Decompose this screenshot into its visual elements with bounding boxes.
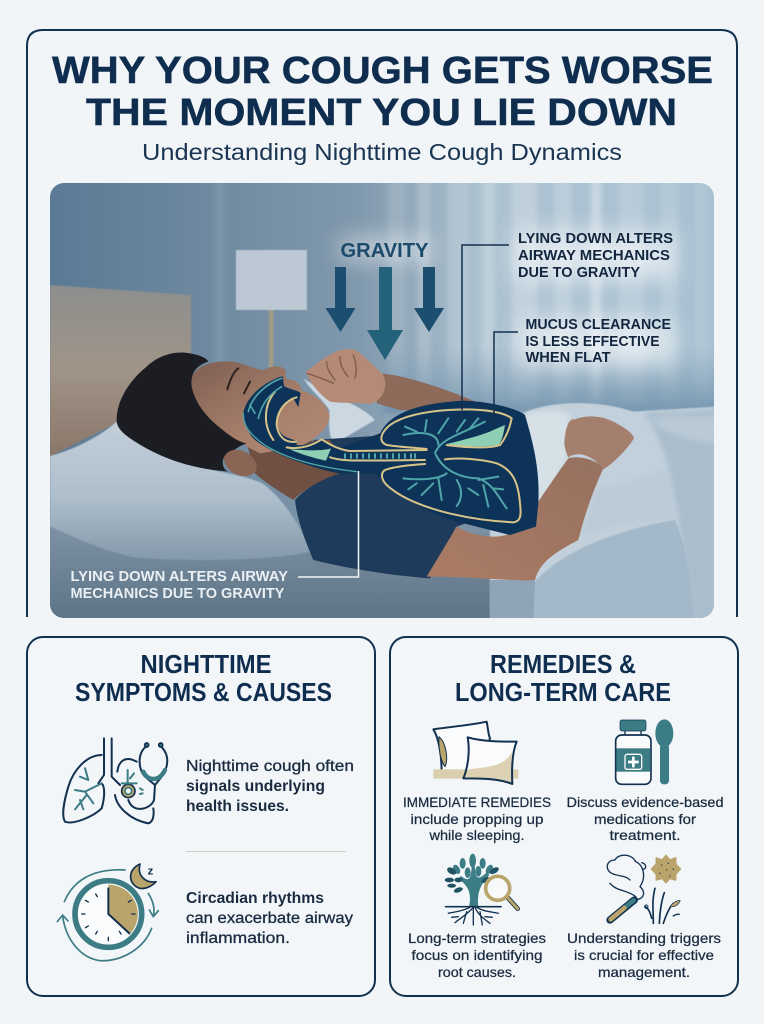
title: THE MOMENT YOU LIE DOWN — [86, 92, 677, 134]
text: triggers: management. — [598, 964, 690, 980]
heading: remedies — [455, 651, 671, 707]
heading: symptoms: NIGHTTIME — [140, 651, 272, 679]
text: underlying health issues: signals underlying — [186, 778, 325, 795]
callout leader: airway mechanics — [462, 245, 509, 410]
neck — [247, 440, 347, 500]
text: immediate remedies: while sleeping. — [428, 827, 524, 843]
heading: symptoms: SYMPTOMS & CAUSES — [75, 679, 332, 707]
callout: lower label: LYING DOWN ALTERS AIRWAY — [70, 568, 288, 585]
icon: pillows — [433, 722, 518, 784]
text: long-term strategies: root causes. — [438, 964, 516, 980]
title — [52, 50, 713, 134]
heading: remedies: REMEDIES & — [490, 651, 636, 679]
callout: mucus clearance: WHEN FLAT — [526, 349, 610, 366]
callout: mucus clearance: IS LESS EFFECTIVE — [526, 333, 660, 350]
blanket — [490, 403, 717, 623]
text: underlying health issues — [186, 758, 354, 815]
text: circadian rhythms: Circadian rhythms — [186, 890, 324, 907]
icon: smoke, pollen and grass triggers — [607, 855, 680, 923]
text: underlying health issues: health issues. — [186, 798, 289, 815]
callout: airway mechanics — [518, 233, 672, 277]
text: triggers: Understanding triggers — [567, 930, 721, 946]
person: lower arm and hand — [427, 416, 634, 580]
callout: airway mechanics: AIRWAY MECHANICS — [518, 247, 670, 264]
icon: lungs with stethoscope — [63, 738, 167, 823]
callout leader: mucus — [494, 332, 518, 428]
panel: top frame — [27, 30, 737, 617]
subtitle: Understanding Nighttime Cough Dynamics — [142, 139, 622, 165]
text: medications — [566, 794, 724, 843]
bronchi — [243, 378, 507, 508]
mattress — [50, 520, 714, 620]
navy anatomy patch — [243, 376, 539, 535]
callout leader: lower label — [298, 471, 358, 577]
person: head, pillows and raised arm — [50, 349, 483, 578]
back pillow — [303, 378, 375, 443]
gravity label: GRAVITY — [340, 239, 429, 262]
text: circadian rhythms: can exacerbate airway — [186, 910, 353, 927]
heading: symptoms — [75, 651, 332, 707]
callout: mucus clearance — [526, 319, 670, 362]
text: long-term strategies: Long-term strategies — [408, 930, 546, 946]
illustration: patient lying in bed with airway overlay — [50, 180, 721, 623]
text: underlying health issues: Nighttime cough often — [186, 758, 354, 775]
mucus in lung — [447, 425, 505, 446]
mucus in throat — [290, 448, 331, 461]
bedroom wall, curtains, lamp and headboard — [50, 180, 721, 457]
text: medications: treatment. — [610, 827, 680, 843]
callout: airway mechanics: LYING DOWN ALTERS — [518, 230, 673, 247]
text: immediate remedies — [403, 794, 551, 843]
lung outlines — [266, 392, 521, 522]
fist — [306, 349, 385, 404]
panel: nighttime symptoms and causes — [27, 637, 375, 996]
title: WHY YOUR COUGH GETS WORSE — [52, 50, 713, 92]
hair — [117, 352, 247, 472]
callout: airway mechanics: DUE TO GRAVITY — [518, 264, 640, 281]
text: triggers: is crucial for effective — [574, 947, 714, 963]
airway and lung overlay — [243, 376, 539, 535]
panel: remedies and long-term care — [390, 637, 738, 996]
heading: remedies: LONG-TERM CARE — [455, 679, 671, 707]
raised forearm — [376, 374, 475, 410]
callout: lower label: MECHANICS DUE TO GRAVITY — [70, 585, 284, 602]
text: immediate remedies: include propping up — [410, 811, 544, 827]
main pillow — [50, 422, 312, 560]
text: long-term strategies — [408, 930, 546, 980]
text: immediate remedies: IMMEDIATE REMEDIES — [403, 794, 551, 810]
face — [191, 361, 329, 453]
icon: medicine bottle and spoon — [616, 719, 673, 784]
text: medications: medications for — [594, 811, 696, 827]
icon: tree with magnifier — [445, 854, 518, 925]
callout: lower label — [71, 571, 288, 598]
ear — [223, 450, 257, 476]
text glow — [340, 232, 675, 366]
gravity arrows — [326, 267, 444, 360]
text: medications: Discuss evidence-based — [566, 794, 724, 810]
shirt — [295, 436, 465, 578]
callout: mucus clearance: MUCUS CLEARANCE — [526, 316, 671, 333]
icon: clock with moon — [57, 864, 158, 961]
eyebrow and closed eye — [227, 368, 250, 393]
text: circadian rhythms: inflammation. — [186, 930, 290, 947]
icon: clock with moon: z — [148, 866, 154, 878]
text: long-term strategies: focus on identifying — [412, 947, 542, 963]
text: triggers — [567, 930, 721, 980]
text: circadian rhythms — [186, 890, 353, 947]
